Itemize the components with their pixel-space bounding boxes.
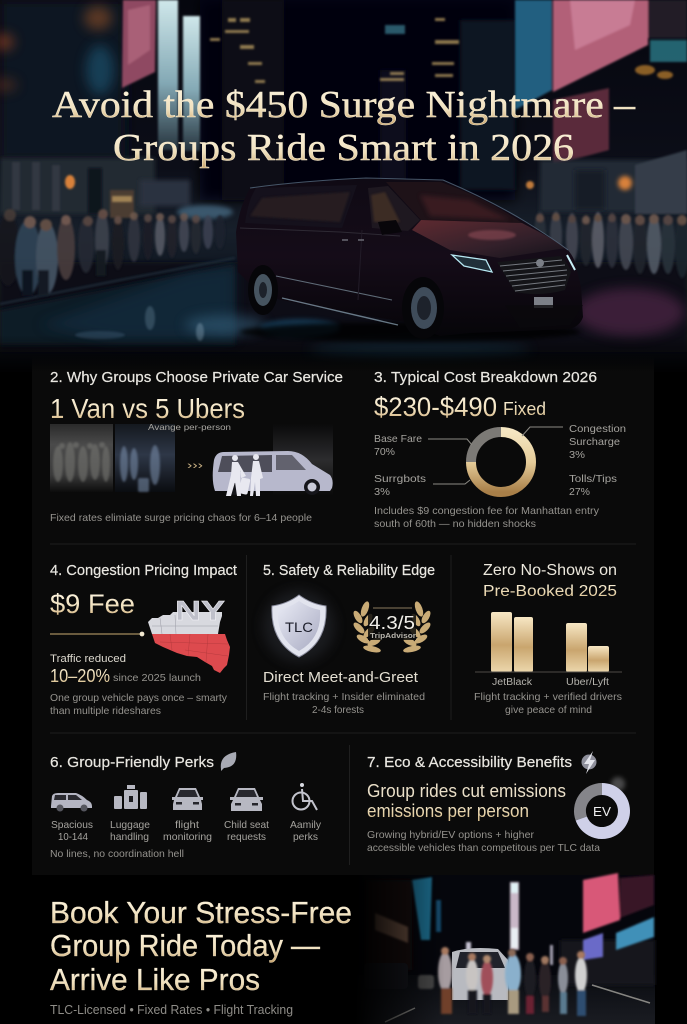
label: congestion surcharge — [569, 423, 626, 461]
bar chart: Uber/Lyft — [566, 677, 609, 688]
label: surcharge left: Surrgbots — [374, 473, 426, 485]
emissions statement: emissions per person — [367, 800, 529, 821]
left laurel — [352, 600, 382, 654]
perk label: spacious — [51, 819, 93, 843]
big stat: 1 Van vs 5 Ubers — [50, 393, 245, 424]
street backdrop — [0, 0, 687, 372]
traffic stat: Traffic reduced — [50, 653, 126, 665]
icon: leaf — [221, 752, 236, 771]
rating laurel — [352, 600, 432, 654]
heading — [483, 562, 617, 600]
donut leader lines — [428, 427, 563, 484]
TLC shield badge — [263, 590, 335, 662]
body text: 2-4s forests — [312, 704, 364, 716]
bar chart — [475, 612, 622, 688]
body text: One group vehicle pays once – smarty — [50, 692, 228, 704]
CTA heading: Book Your Stress-Free — [50, 895, 352, 930]
perk label: child seat: requests — [227, 831, 266, 843]
billboards — [412, 873, 654, 965]
content panel background — [32, 372, 654, 875]
map of New York: NY — [175, 595, 225, 626]
hero photo: rainy city street with van — [0, 0, 687, 375]
door handles — [342, 239, 364, 241]
bar chart: JetBlack — [492, 677, 533, 688]
panel: zero no-shows — [474, 562, 622, 716]
main title — [52, 84, 636, 169]
panel: safety and reliability edge — [263, 562, 435, 716]
licence plate — [534, 297, 553, 308]
perk label: family: Aamily — [290, 819, 322, 831]
label: tolls and tips — [569, 473, 617, 498]
body text: Growing hybrid/EV options + higher — [367, 829, 535, 841]
emissions statement — [367, 780, 566, 821]
perk label: flight monitoring — [163, 819, 212, 843]
heading: 6. Group-Friendly Perks — [50, 754, 214, 771]
windshield — [386, 182, 522, 223]
icon: car front two — [230, 788, 263, 811]
TLC shield badge: TLC — [285, 619, 313, 635]
closing photo: group at night in Times Square — [355, 873, 655, 1024]
parked vehicles — [364, 948, 508, 1000]
body text — [367, 829, 600, 854]
storefronts and street lamps — [0, 150, 687, 219]
label: tolls and tips: 27% — [569, 486, 590, 498]
traffic stat: 10–20% — [50, 666, 110, 686]
CTA heading: Group Ride Today — — [50, 928, 320, 963]
panel: congestion pricing impact — [50, 562, 238, 717]
perk label: flight monitoring: flight — [175, 819, 199, 831]
label: surcharge left: 3% — [374, 486, 390, 498]
right laurel — [402, 600, 432, 654]
emissions statement: Group rides cut emissions — [367, 780, 566, 801]
donut chart — [471, 432, 531, 492]
left billboards — [122, 0, 200, 151]
perk label: child seat — [224, 819, 269, 843]
pointer line — [50, 632, 144, 636]
black van — [236, 178, 583, 342]
heading: 2. Why Groups Choose Private Car Service — [50, 369, 343, 386]
perk label: luggage — [110, 819, 150, 843]
map of New York — [148, 595, 230, 673]
traffic stat — [50, 653, 201, 686]
front wheel — [402, 277, 444, 339]
road reflections — [0, 258, 687, 360]
main title: Avoid the $450 Surge Nightmare – — [52, 84, 636, 126]
label: surcharge left — [374, 473, 426, 498]
building windows — [210, 18, 459, 83]
headlight — [452, 255, 492, 272]
heading: 3. Typical Cost Breakdown 2026 — [374, 369, 597, 386]
label: congestion surcharge: Congestion — [569, 423, 626, 435]
mirror — [378, 220, 402, 235]
icon: luggage — [114, 785, 147, 809]
crowd thumbnail grey — [50, 424, 113, 492]
crowd on the right pavement — [534, 211, 687, 278]
panel: group-friendly perks — [50, 752, 322, 860]
grille — [497, 256, 571, 294]
heading: 5. Safety & Reliability Edge — [263, 562, 435, 579]
rear windows — [245, 185, 357, 228]
group of passengers — [438, 947, 587, 1016]
fixed price range: Fixed — [503, 399, 546, 419]
body text: Includes $9 congestion fee for Manhattan entry — [374, 505, 600, 517]
perk label: spacious: 10-144 — [58, 831, 88, 843]
perk label: family — [290, 819, 322, 843]
label: base fare — [374, 433, 422, 458]
body text: Fixed rates elimiate surge pricing chaos for 6–14 people — [50, 512, 312, 524]
body text: Flight tracking + Insider eliminated — [263, 691, 425, 703]
label: base fare: 70% — [374, 446, 395, 458]
perk label: luggage: Luggage — [110, 819, 150, 831]
body text: give peace of mind — [505, 704, 592, 716]
icon: car front one — [172, 788, 203, 810]
heading: 7. Eco & Accessibility Benefits — [367, 754, 572, 771]
panel: eco and accessibility — [367, 751, 625, 854]
label: base fare: Base Fare — [374, 433, 422, 445]
main title: Groups Ride Smart in 2026 — [113, 127, 574, 169]
label: tolls and tips: Tolls/Tips — [569, 473, 617, 485]
perk label: spacious: Spacious — [51, 819, 93, 831]
EV donut: EV — [593, 804, 611, 819]
heading: 4. Congestion Pricing Impact — [50, 562, 238, 579]
roof edge light — [250, 178, 568, 250]
heading: Pre-Booked 2025 — [483, 583, 617, 600]
body text: south of 60th — no hidden shocks — [374, 518, 536, 530]
right billboards — [515, 0, 687, 165]
perk label: child seat: Child seat — [224, 819, 269, 831]
label: congestion surcharge: 3% — [569, 449, 585, 461]
icon: wheelchair — [292, 783, 317, 810]
left fade — [355, 875, 445, 1024]
call to action — [50, 895, 352, 1017]
body text — [474, 691, 622, 716]
body text — [263, 691, 425, 716]
side character lines — [276, 276, 392, 300]
EV donut — [580, 777, 625, 833]
rear wheel — [248, 265, 278, 315]
panel: why groups choose private car service — [50, 369, 343, 524]
night street backdrop — [355, 875, 655, 1024]
body text — [374, 505, 600, 530]
body text: No lines, no coordination hell — [50, 848, 184, 860]
body text — [50, 692, 228, 717]
front side window — [368, 186, 420, 231]
subheading: Direct Meet-and-Greet — [263, 669, 419, 686]
van with passengers — [213, 451, 333, 496]
CTA tagline: TLC-Licensed • Fixed Rates • Flight Tracking — [50, 1003, 293, 1017]
body text: than multiple rideshares — [50, 705, 161, 717]
rating laurel: 4.3/5 — [369, 613, 415, 633]
body text: accessible vehicles than competitous per TLC data — [367, 842, 600, 854]
CTA heading — [50, 895, 352, 997]
fee stat: $9 Fee — [50, 589, 135, 619]
caption: average per-person: Avange per-person — [148, 422, 231, 432]
perk label: luggage: handling — [110, 831, 149, 843]
fixed price range: $230-$490 — [374, 392, 497, 422]
crowd on the left pavement — [0, 209, 225, 296]
road markings — [385, 985, 650, 1022]
heading: Zero No-Shows on — [483, 562, 617, 579]
hero fade to black — [0, 335, 687, 375]
icon: van — [51, 793, 92, 812]
hood — [412, 220, 566, 258]
icon: bolt leaf — [582, 751, 596, 774]
crowd thumbnail blue — [115, 424, 175, 492]
traffic stat: since 2025 launch — [113, 672, 201, 684]
arrows: ››› — [187, 460, 203, 472]
CTA heading: Arrive Like Pros — [50, 962, 260, 997]
panel: typical cost breakdown — [374, 369, 626, 530]
rating laurel: TripAdvisor — [370, 631, 416, 640]
label: congestion surcharge: Surcharge — [569, 436, 620, 448]
perk label: flight monitoring: monitoring — [163, 831, 212, 843]
body text: Flight tracking + verified drivers — [474, 691, 622, 703]
van backdrop — [273, 424, 333, 496]
perk label: family: perks — [293, 831, 318, 843]
